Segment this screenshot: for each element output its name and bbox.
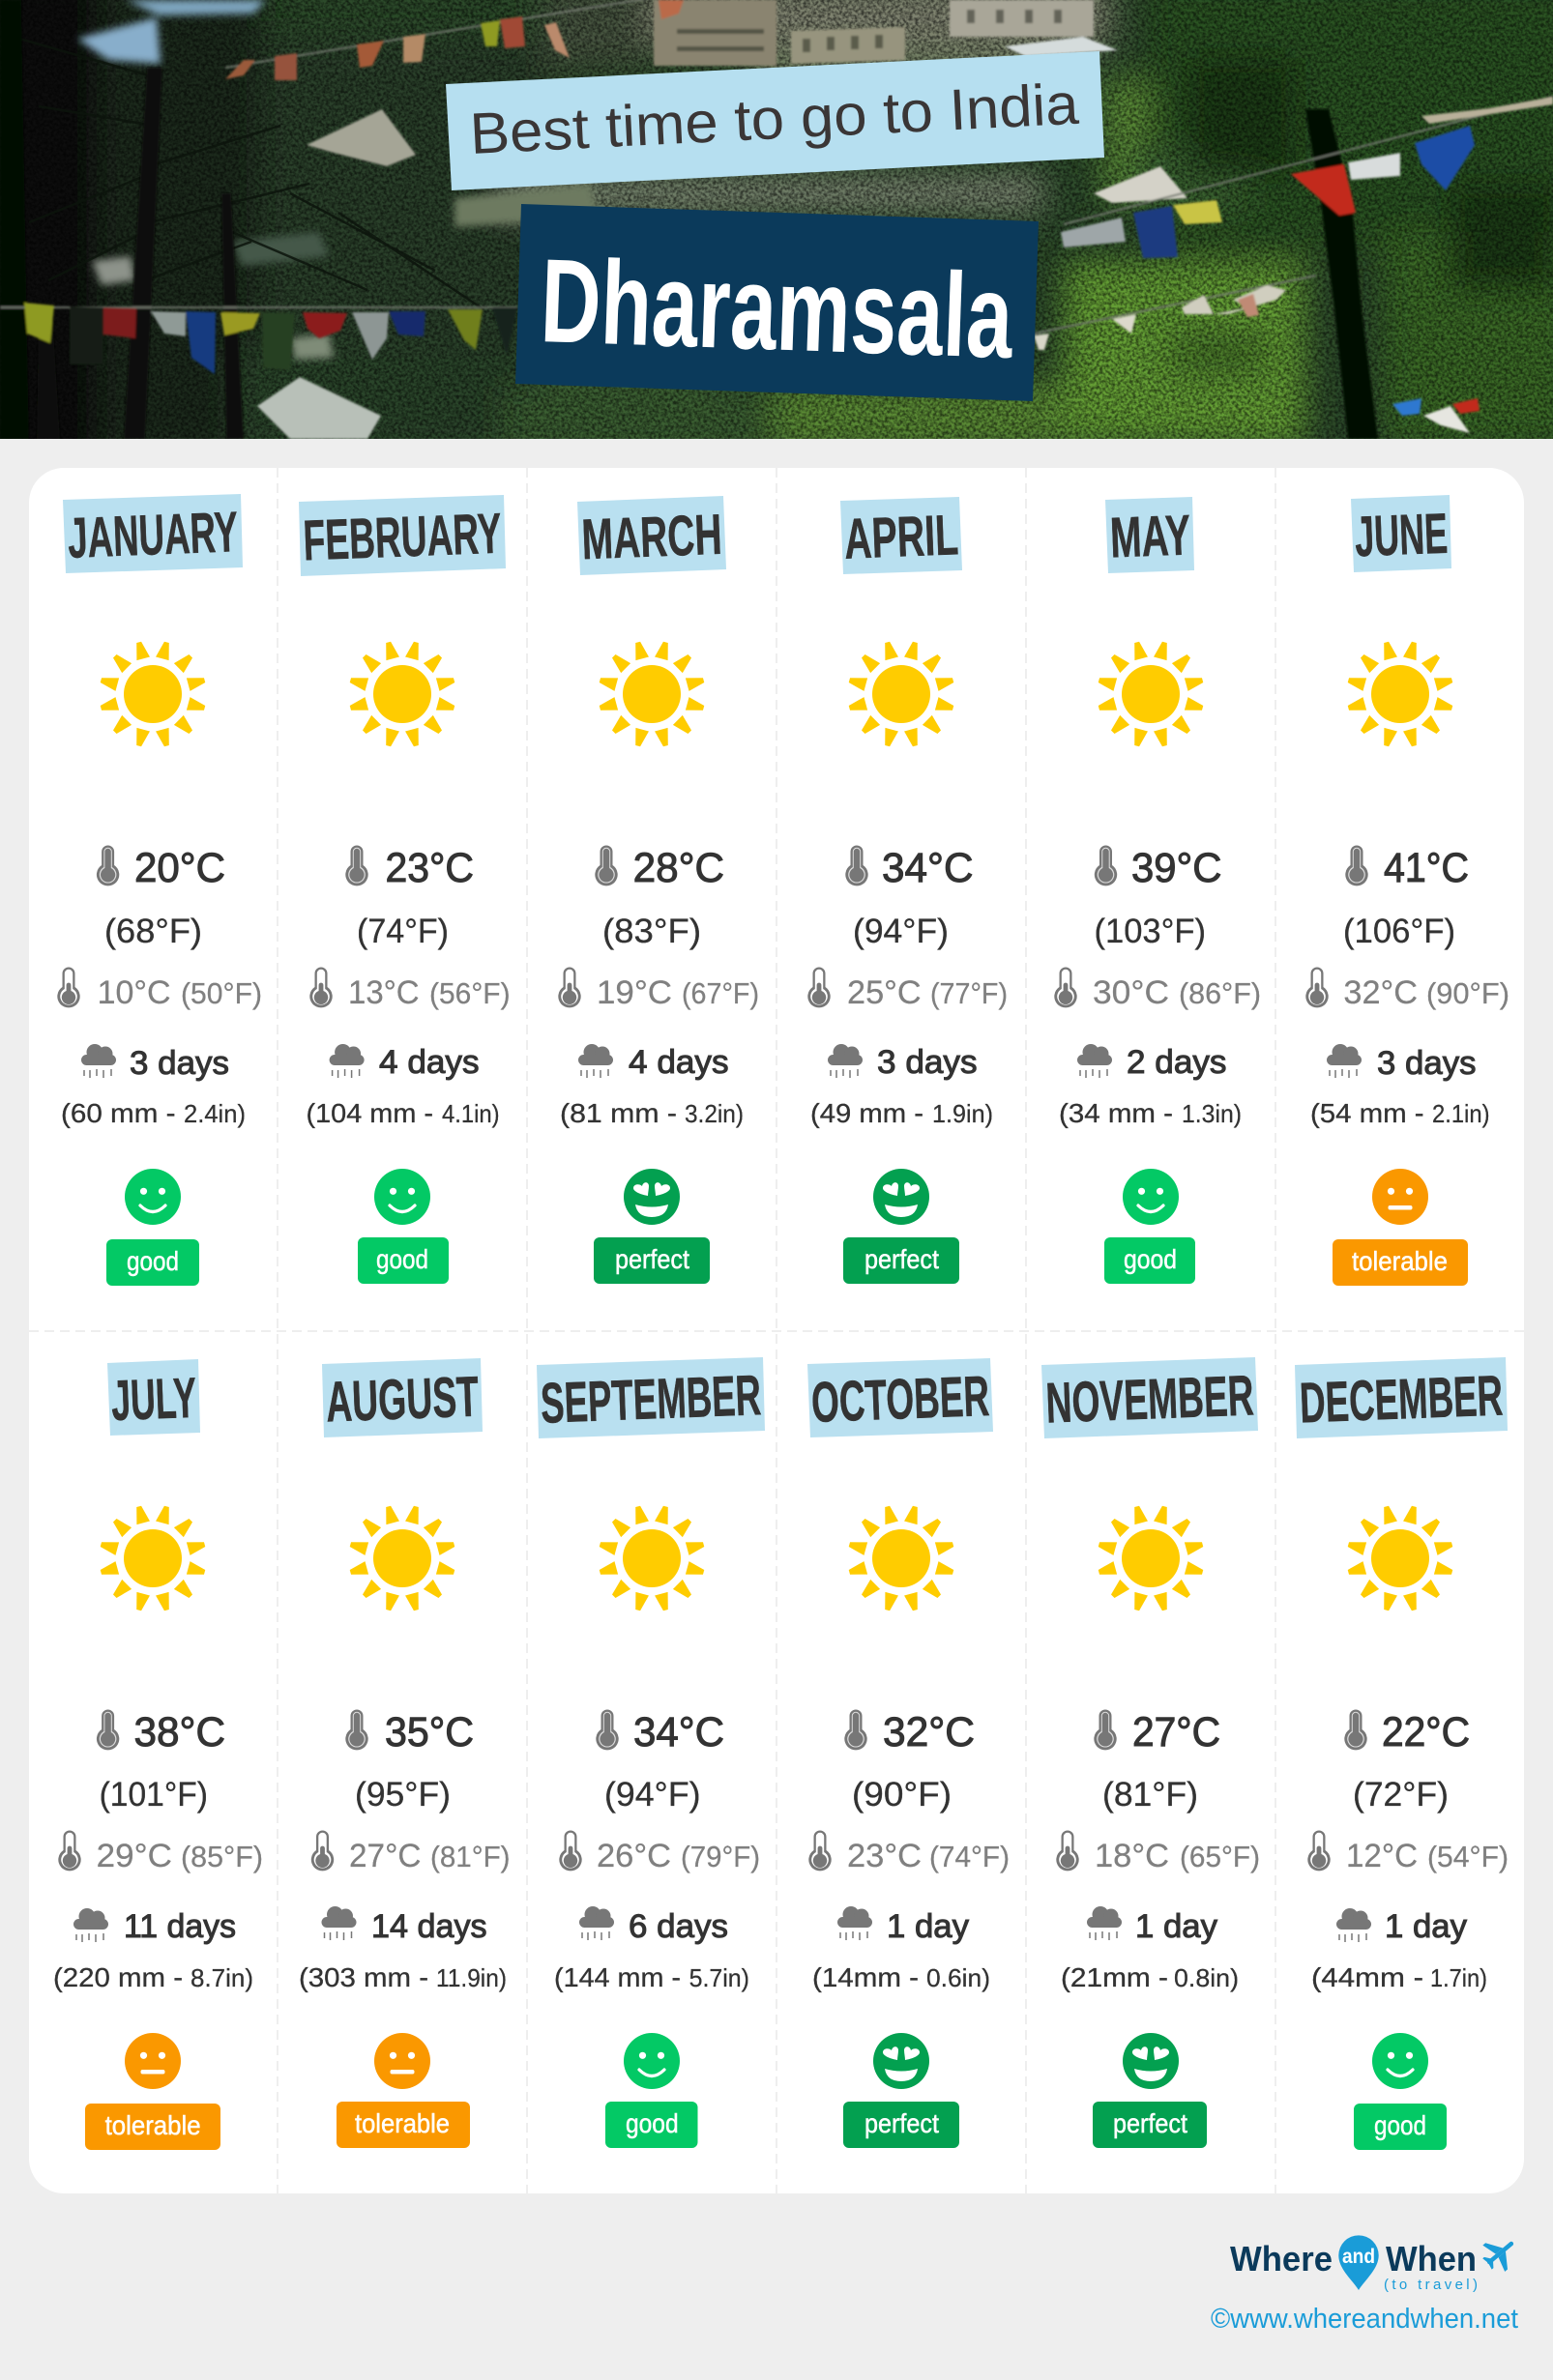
high temperature in Fahrenheit: (94°F) xyxy=(604,1776,700,1814)
panel: June xyxy=(1305,495,1509,1286)
rating badge: perfect: perfect xyxy=(864,2108,939,2138)
icon: airplane xyxy=(1477,2229,1524,2278)
month heading: February xyxy=(299,495,506,576)
icon: sun xyxy=(848,641,954,747)
low temperature xyxy=(1056,1831,1260,1874)
rainfall amount: (44mm - xyxy=(1311,1962,1423,1992)
rainy days: 1 day xyxy=(887,1908,969,1945)
rainfall amount: 4.1in) xyxy=(442,1099,500,1128)
rating badge: good xyxy=(358,1237,449,1284)
rating face: perfect xyxy=(1123,2033,1179,2089)
rating badge: perfect xyxy=(1093,2102,1207,2148)
low temperature xyxy=(807,967,1008,1011)
low temperature xyxy=(1054,967,1261,1011)
icon: sun xyxy=(349,1505,455,1611)
rainfall amount: 2.4in) xyxy=(184,1099,246,1128)
month heading: July: JULY xyxy=(110,1366,197,1433)
rainfall amount: 1.7in) xyxy=(1430,1963,1487,1992)
high temperature: 27°C xyxy=(1132,1709,1220,1756)
high temperature in Fahrenheit: (103°F) xyxy=(1095,913,1206,950)
rating badge: tolerable xyxy=(337,2102,470,2148)
rating face: tolerable xyxy=(125,2033,181,2089)
website credit: ©www.whereandwhen.net xyxy=(1211,2304,1518,2335)
icon: sun xyxy=(1347,641,1453,747)
low temperature: (85°F) xyxy=(181,1840,263,1873)
rainfall amount xyxy=(560,1098,744,1128)
rainy days xyxy=(1327,1044,1476,1082)
low temperature: (77°F) xyxy=(930,976,1008,1010)
month heading: November: NOVEMBER xyxy=(1044,1363,1255,1436)
rainy days: 1 day xyxy=(1385,1908,1467,1945)
rainy days: 3 days xyxy=(877,1044,978,1081)
rainfall amount: (14mm - xyxy=(812,1962,919,1992)
high temperature: 32°C xyxy=(883,1709,975,1756)
rating badge: tolerable: tolerable xyxy=(105,2110,201,2140)
high temperature: 20°C xyxy=(134,845,225,891)
rainy days: 1 day xyxy=(1135,1908,1217,1945)
rainfall amount xyxy=(306,1098,500,1128)
rating face: perfect xyxy=(873,2033,929,2089)
month heading: April xyxy=(840,497,962,574)
city banner: Dharamsala xyxy=(515,204,1039,401)
rating badge: perfect xyxy=(843,2102,959,2148)
rainfall amount: (81 mm - xyxy=(560,1098,677,1128)
rainy days xyxy=(578,1044,729,1081)
rainfall amount: (104 mm - xyxy=(306,1098,433,1128)
rating badge: perfect xyxy=(843,1237,959,1284)
month heading: November xyxy=(1041,1357,1258,1438)
rating badge: good xyxy=(605,2102,698,2148)
rating badge: good xyxy=(1354,2104,1447,2150)
high temperature: 34°C xyxy=(882,845,973,891)
rainy days xyxy=(330,1044,480,1081)
high temperature: 38°C xyxy=(133,1709,225,1756)
rainfall amount xyxy=(810,1098,993,1128)
rainfall amount: (34 mm - xyxy=(1059,1098,1173,1128)
rainy days xyxy=(1087,1906,1217,1945)
icon: sun xyxy=(848,1505,954,1611)
rating badge: perfect: perfect xyxy=(1113,2108,1187,2138)
rainy days: 4 days xyxy=(629,1044,729,1081)
low temperature: (81°F) xyxy=(430,1840,511,1873)
rainy days: 11 days xyxy=(124,1908,236,1945)
icon: sun xyxy=(599,1505,705,1611)
icon: sun xyxy=(100,1505,206,1611)
panel: monthly climate card xyxy=(29,468,1524,2193)
month heading: February: FEBRUARY xyxy=(302,502,503,572)
month heading: January xyxy=(63,494,243,573)
high temperature: 22°C xyxy=(1382,1709,1470,1756)
rating badge: tolerable: tolerable xyxy=(1352,1246,1448,1276)
rating badge: good: good xyxy=(626,2108,679,2138)
rainy days: 3 days xyxy=(130,1045,229,1082)
low temperature xyxy=(559,1831,760,1874)
high temperature xyxy=(345,1709,474,1756)
month heading: July xyxy=(107,1359,200,1436)
rainfall amount xyxy=(53,1962,253,1992)
month heading: August: AUGUST xyxy=(325,1364,480,1435)
panel: December xyxy=(1295,1357,1509,2150)
rating face: good xyxy=(1372,2033,1428,2089)
logo word: When: When xyxy=(1386,2239,1477,2278)
low temperature xyxy=(808,1831,1010,1874)
photo: prayer flags and trees above Dharamsala xyxy=(0,0,1553,474)
rainfall amount: (49 mm - xyxy=(810,1098,923,1128)
month heading: June xyxy=(1351,495,1451,572)
rating badge: tolerable xyxy=(85,2104,220,2150)
high temperature xyxy=(844,1709,975,1756)
rating badge: perfect: perfect xyxy=(615,1244,689,1274)
rainfall amount: 3.2in) xyxy=(685,1099,744,1128)
rainfall amount: (303 mm - xyxy=(299,1962,428,1992)
icon: sun xyxy=(349,641,455,747)
icon: sun xyxy=(1347,1505,1453,1611)
rating face: good xyxy=(1123,1169,1179,1225)
low temperature: 23°C xyxy=(847,1838,922,1874)
high temperature in Fahrenheit: (83°F) xyxy=(602,913,701,950)
rainfall amount xyxy=(1311,1962,1487,1992)
panel: January xyxy=(57,494,262,1286)
high temperature: 28°C xyxy=(633,845,724,891)
logo word: Where: Where xyxy=(1230,2239,1333,2278)
high temperature xyxy=(1344,1709,1470,1756)
month heading: August xyxy=(322,1358,483,1437)
panel: April xyxy=(807,497,1008,1284)
low temperature: 26°C xyxy=(597,1838,671,1874)
rainfall amount: 1.3in) xyxy=(1182,1099,1242,1128)
high temperature in Fahrenheit: (95°F) xyxy=(355,1776,451,1814)
low temperature xyxy=(57,967,262,1011)
high temperature in Fahrenheit: (90°F) xyxy=(852,1776,952,1814)
rating badge: perfect: perfect xyxy=(864,1244,939,1274)
rainy days xyxy=(837,1906,969,1945)
rainfall amount: (54 mm - xyxy=(1310,1098,1423,1128)
high temperature xyxy=(1095,845,1222,891)
low temperature: (50°F) xyxy=(181,976,262,1010)
rating badge: perfect xyxy=(594,1237,710,1284)
high temperature: 23°C xyxy=(385,845,474,891)
month heading: September: SEPTEMBER xyxy=(540,1363,762,1436)
rainfall amount: (60 mm - xyxy=(61,1098,176,1128)
logo: Where and When to travel xyxy=(1230,2229,1524,2293)
low temperature: (90°F) xyxy=(1426,976,1509,1010)
rating badge: good xyxy=(1104,1237,1195,1284)
rainfall amount xyxy=(61,1098,246,1128)
month heading: October: OCTOBER xyxy=(810,1364,990,1435)
low temperature: (56°F) xyxy=(429,976,511,1010)
low temperature: (86°F) xyxy=(1179,976,1261,1010)
icon: location pin with and: and xyxy=(1342,2246,1375,2268)
rainfall amount: 11.9in) xyxy=(436,1963,507,1992)
rainy days xyxy=(828,1044,978,1081)
low temperature xyxy=(1305,967,1509,1011)
icon: sun xyxy=(100,641,206,747)
rating badge: tolerable: tolerable xyxy=(355,2108,450,2138)
high temperature in Fahrenheit: (68°F) xyxy=(104,913,202,950)
logo tagline: (to travel) xyxy=(1384,2277,1478,2293)
low temperature: 18°C xyxy=(1095,1838,1169,1874)
high temperature in Fahrenheit: (106°F) xyxy=(1343,913,1455,950)
rating badge: tolerable xyxy=(1333,1239,1468,1286)
panel: July xyxy=(53,1359,263,2150)
high temperature xyxy=(1345,845,1469,891)
low temperature: (54°F) xyxy=(1427,1840,1509,1873)
rainfall amount: 0.8in) xyxy=(1174,1963,1239,1992)
rating badge: good xyxy=(106,1239,199,1286)
rating badge: good: good xyxy=(127,1246,179,1276)
rainy days xyxy=(81,1044,229,1082)
low temperature: 19°C xyxy=(597,974,672,1011)
title banner: best time to go to India: Best time to go to India xyxy=(468,72,1081,166)
rainfall amount: (21mm - xyxy=(1061,1962,1168,1992)
rainfall amount: 1.9in) xyxy=(932,1099,993,1128)
high temperature in Fahrenheit: (74°F) xyxy=(357,913,449,950)
month heading: September xyxy=(537,1357,765,1438)
icon: sun xyxy=(599,641,705,747)
month heading: June: JUNE xyxy=(1354,502,1449,568)
rainfall amount xyxy=(1059,1098,1242,1128)
icon: location pin with and xyxy=(1338,2235,1379,2290)
rainfall amount xyxy=(299,1962,507,1992)
high temperature: 35°C xyxy=(385,1709,474,1756)
rainfall amount: 2.1in) xyxy=(1432,1099,1489,1128)
rainy days: 14 days xyxy=(371,1908,487,1945)
rainfall amount: 8.7in) xyxy=(190,1963,253,1992)
panel: October xyxy=(807,1358,1010,2148)
high temperature in Fahrenheit: (72°F) xyxy=(1353,1776,1449,1814)
high temperature: 39°C xyxy=(1131,845,1222,891)
high temperature: 41°C xyxy=(1384,845,1469,891)
low temperature xyxy=(558,967,759,1011)
rainy days: 4 days xyxy=(379,1044,480,1081)
low temperature xyxy=(311,1831,511,1874)
panel: August xyxy=(299,1358,511,2148)
month heading: April: APRIL xyxy=(843,503,959,571)
rating badge: good: good xyxy=(1374,2110,1426,2140)
panel: November xyxy=(1041,1357,1260,2148)
panel: February xyxy=(299,495,511,1284)
rainy days: 3 days xyxy=(1377,1045,1476,1082)
rainfall amount xyxy=(812,1962,990,1992)
month heading: May xyxy=(1105,497,1194,573)
high temperature xyxy=(97,845,225,891)
low temperature: (65°F) xyxy=(1180,1840,1260,1873)
rainfall amount xyxy=(1310,1098,1489,1128)
month heading: January: JANUARY xyxy=(67,500,239,570)
month heading: May: MAY xyxy=(1109,503,1191,570)
rainfall amount: (144 mm - xyxy=(554,1962,681,1992)
rainy days xyxy=(73,1908,236,1945)
rainfall amount xyxy=(554,1962,749,1992)
rainy days xyxy=(321,1906,487,1945)
high temperature in Fahrenheit: (81°F) xyxy=(1102,1776,1198,1814)
rainy days xyxy=(1077,1044,1226,1081)
rainy days: 6 days xyxy=(629,1908,728,1945)
low temperature xyxy=(1307,1831,1509,1874)
low temperature: 32°C xyxy=(1343,974,1418,1011)
rainy days xyxy=(1336,1908,1467,1945)
month heading: October xyxy=(807,1358,993,1437)
high temperature in Fahrenheit: (101°F) xyxy=(100,1776,208,1814)
high temperature in Fahrenheit: (94°F) xyxy=(853,913,949,950)
low temperature xyxy=(309,967,511,1011)
rating face: good xyxy=(125,1169,181,1225)
rating badge: good: good xyxy=(1124,1244,1177,1274)
low temperature: 13°C xyxy=(348,974,420,1011)
panel: May xyxy=(1054,497,1261,1284)
city banner: Dharamsala: Dharamsala xyxy=(539,235,1016,384)
low temperature: (67°F) xyxy=(682,976,759,1010)
rating face: perfect xyxy=(624,1169,680,1225)
low temperature: (74°F) xyxy=(929,1840,1010,1873)
low temperature: 27°C xyxy=(349,1838,422,1874)
icon: sun xyxy=(1098,641,1204,747)
icon: sun xyxy=(1098,1505,1204,1611)
panel: March xyxy=(558,496,759,1284)
high temperature xyxy=(595,845,724,891)
high temperature xyxy=(345,845,474,891)
low temperature xyxy=(58,1831,263,1874)
rainfall amount xyxy=(1061,1962,1239,1992)
month heading: March: MARCH xyxy=(580,503,723,571)
rating badge: good: good xyxy=(376,1244,428,1274)
rating face: tolerable xyxy=(1372,1169,1428,1225)
rainy days: 2 days xyxy=(1127,1044,1226,1081)
rating face: good xyxy=(374,1169,430,1225)
rating face: perfect xyxy=(873,1169,929,1225)
high temperature xyxy=(596,1709,724,1756)
rainfall amount: (220 mm - xyxy=(53,1962,183,1992)
rainy days xyxy=(579,1906,728,1945)
low temperature: 29°C xyxy=(97,1838,172,1874)
low temperature: 30°C xyxy=(1093,974,1169,1011)
high temperature: 34°C xyxy=(633,1709,724,1756)
title banner: best time to go to India xyxy=(446,51,1104,190)
low temperature: 25°C xyxy=(847,974,922,1011)
rainfall amount: 5.7in) xyxy=(689,1963,749,1992)
low temperature: (79°F) xyxy=(681,1840,760,1873)
low temperature: 10°C xyxy=(98,974,171,1011)
rating face: good xyxy=(624,2033,680,2089)
rainfall amount: 0.6in) xyxy=(926,1963,990,1992)
rating face: tolerable xyxy=(374,2033,430,2089)
panel: September xyxy=(537,1357,765,2148)
month heading: March xyxy=(577,496,726,575)
low temperature: 12°C xyxy=(1346,1838,1418,1874)
high temperature xyxy=(1094,1709,1220,1756)
